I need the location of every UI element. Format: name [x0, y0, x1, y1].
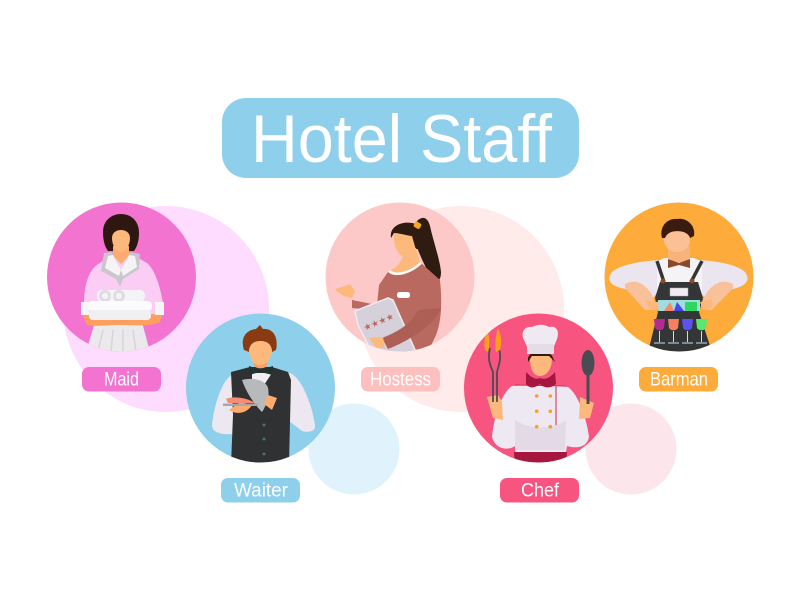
maid label: [82, 367, 161, 392]
background circle: small blue: [308, 404, 400, 494]
illustration: hostess: [335, 218, 441, 352]
illustration: chef: [484, 325, 594, 466]
hostess rating stars: ★★★★: [362, 312, 396, 334]
hostess label: Hostess: [370, 370, 431, 390]
waiter circle: [186, 314, 335, 462]
maid label: Maid: [104, 370, 139, 390]
panel: maid: [47, 202, 196, 392]
barman label: Barman: [650, 370, 708, 390]
background circle: large peach: [358, 206, 564, 412]
title background: [222, 98, 579, 178]
chef label: [500, 478, 579, 502]
illustration: barman: [609, 246, 748, 352]
panel: waiter: [186, 314, 335, 502]
waiter label: [221, 478, 300, 502]
chef circle: [464, 314, 613, 462]
illustration: waiter: [212, 325, 315, 465]
maid face: [112, 230, 130, 252]
panel: hostess: [326, 202, 474, 392]
waiter label: Waiter: [234, 480, 289, 502]
background circle: small pink: [586, 404, 676, 494]
title: [222, 98, 579, 178]
background circle: large pink: [63, 206, 269, 412]
hostess face: [394, 233, 416, 256]
barman head: [661, 219, 694, 252]
infographic canvas: [47, 98, 754, 502]
panel: chef: [464, 314, 613, 502]
maid circle: [47, 202, 196, 352]
barman circle: [604, 202, 754, 352]
hostess circle: [326, 202, 474, 352]
title text: Hotel Staff: [251, 101, 552, 177]
chef label: Chef: [521, 480, 560, 502]
panel: barman: [604, 202, 754, 392]
illustration: maid: [81, 214, 164, 352]
